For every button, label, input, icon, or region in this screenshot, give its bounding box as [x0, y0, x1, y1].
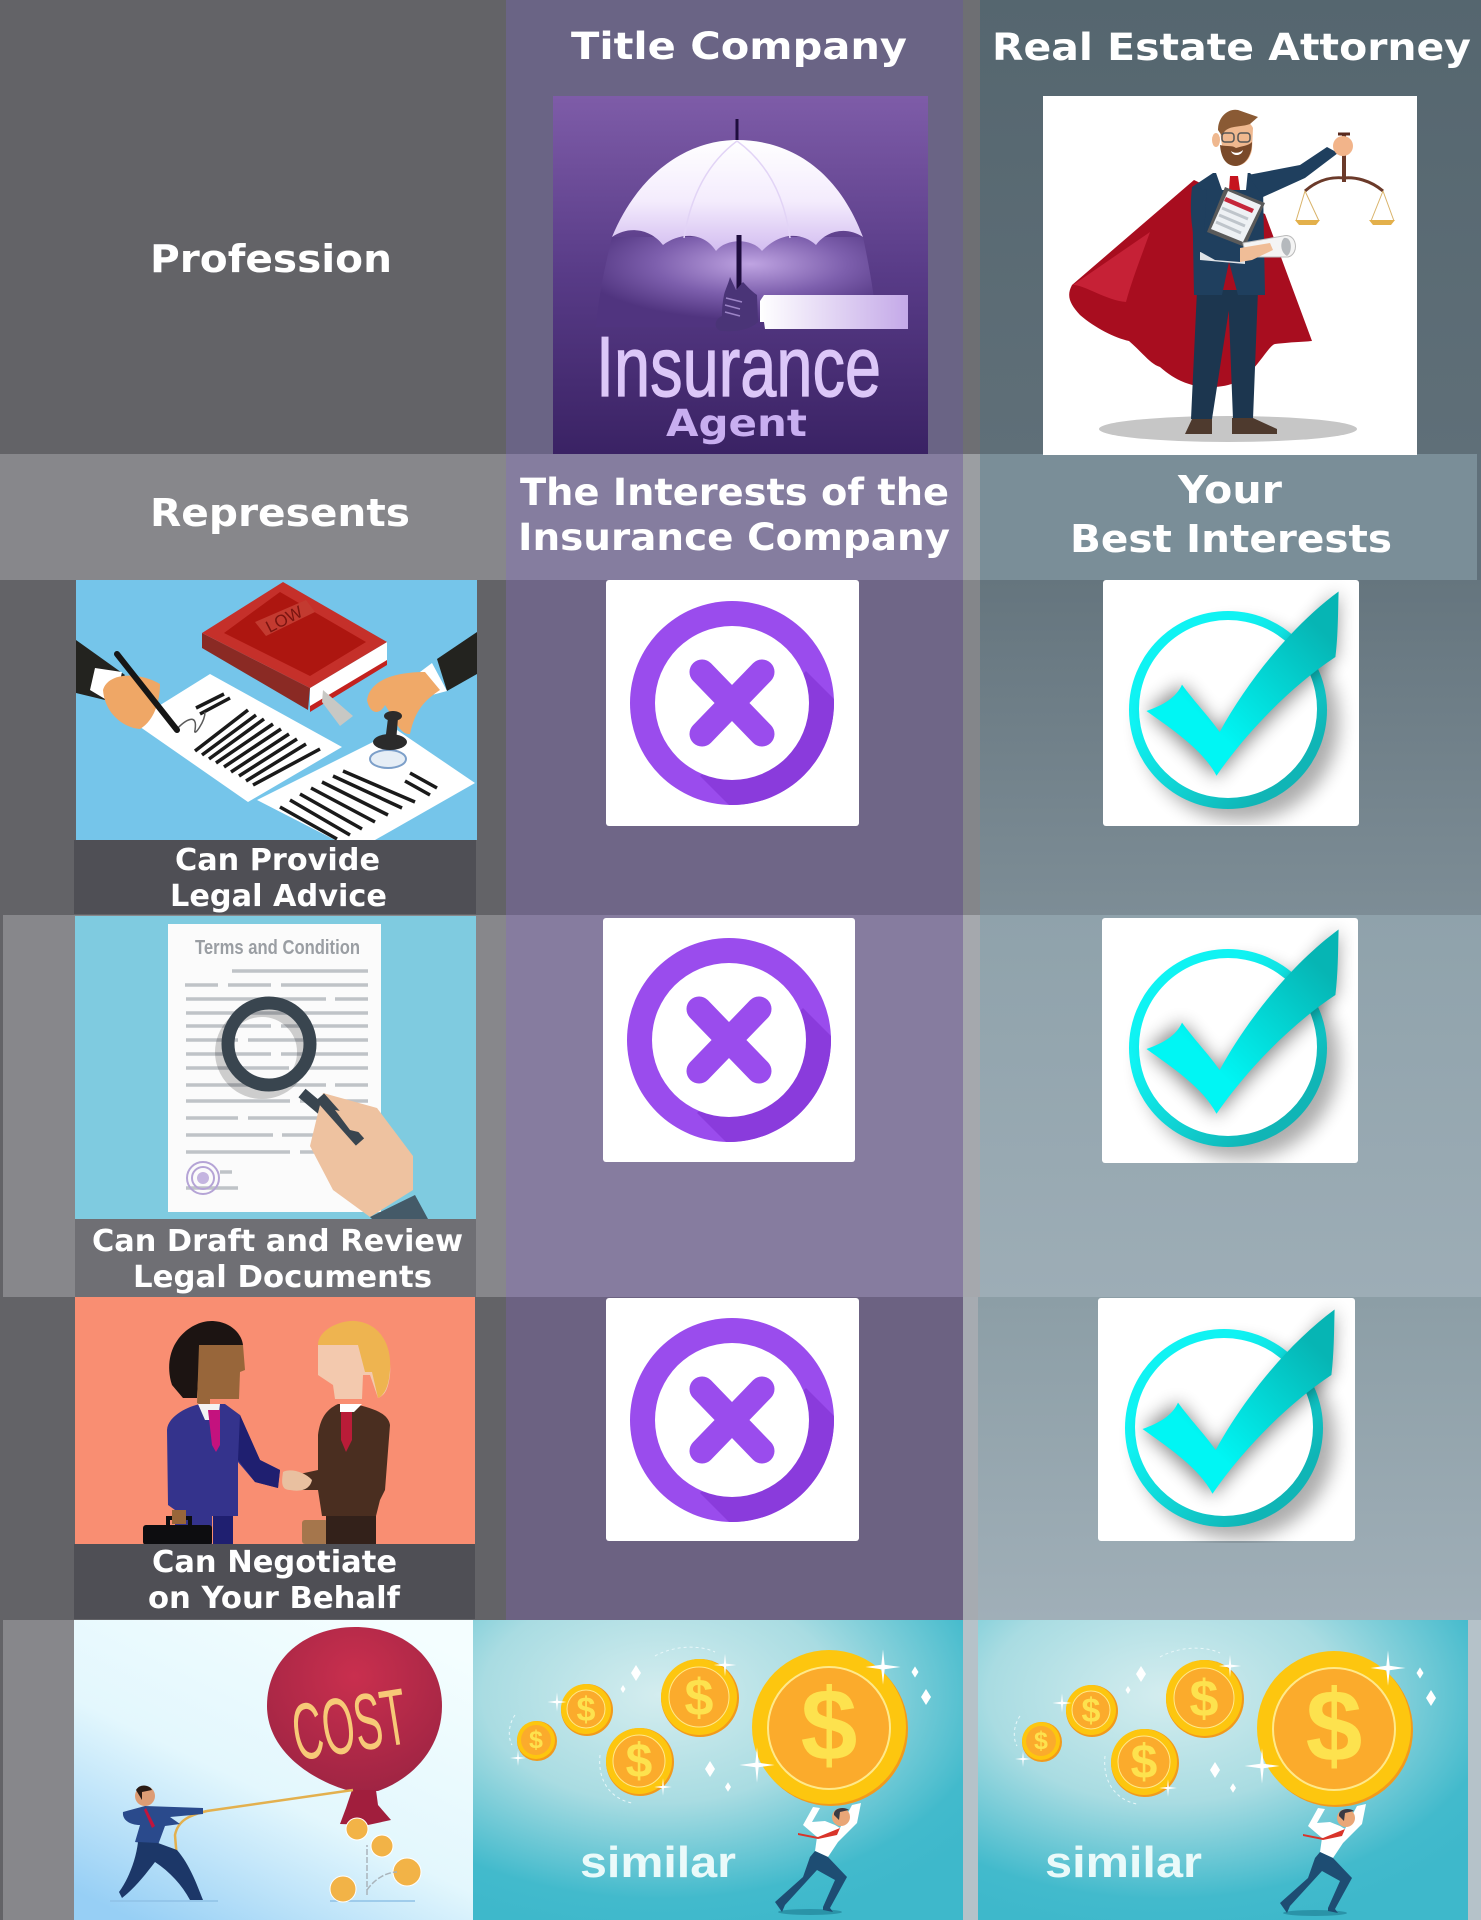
clipboard with documents	[1207, 187, 1265, 247]
image: similar cost, man lifting coins (title company): $	[577, 1691, 596, 1729]
jacket	[1192, 173, 1265, 295]
image: similar cost, man lifting coins (title company): $	[685, 1669, 714, 1727]
rope	[175, 1790, 353, 1872]
image: similar cost, man lifting coins (attorney): $	[1034, 1727, 1048, 1755]
icon: X, title company, negotiate	[606, 1298, 859, 1541]
row label: Represents: Represents	[150, 491, 410, 535]
shoes	[1185, 418, 1277, 434]
law book	[202, 582, 387, 726]
caption: Can Draft and Review Legal Documents: Can Draft and Review	[92, 1224, 463, 1259]
collar and tie	[1215, 170, 1248, 190]
heading: Real Estate Attorney: Real Estate Attorney	[992, 26, 1471, 69]
seal	[187, 1162, 219, 1194]
image: similar cost, man lifting coins (title company): $	[626, 1735, 653, 1788]
scales of justice	[1295, 134, 1395, 225]
image: two businessmen shaking hands	[75, 1297, 475, 1545]
left man	[143, 1321, 280, 1545]
image: similar cost, man lifting coins (attorney): $	[1131, 1736, 1158, 1789]
left sleeve	[76, 640, 125, 700]
image: legal advice, hands signing and stamping	[76, 580, 477, 840]
caption: Can Negotiate on Your Behalf	[74, 1544, 475, 1619]
shadow	[1099, 416, 1357, 442]
document	[168, 924, 381, 1212]
falling coins	[330, 1818, 421, 1902]
image: magnifier reviewing terms and condition document	[75, 916, 476, 1219]
pen	[117, 654, 177, 730]
left cuff and hand	[90, 668, 122, 705]
hand and sleeve	[310, 1093, 428, 1219]
row label: Profession: Profession	[150, 237, 392, 281]
text: Insurance: Insurance	[596, 320, 881, 415]
text: Best Interests: Best Interests	[1070, 517, 1392, 561]
image: similar cost, man lifting coins (attorney): $	[1190, 1670, 1219, 1728]
caption: Can Provide Legal Advice: Legal Advice	[170, 879, 387, 914]
icon: hand gripping handle	[716, 277, 758, 331]
image: similar cost, man lifting coins (title company): $	[801, 1668, 857, 1782]
caption: Can Negotiate on Your Behalf: on Your Behalf	[148, 1581, 401, 1616]
caption: Can Provide Legal Advice	[74, 840, 476, 914]
head	[1212, 110, 1258, 166]
red cape	[1069, 180, 1312, 387]
image: similar cost, man lifting coins (attorney): $	[1306, 1669, 1362, 1783]
image: attorney superhero with cape and scales	[1043, 96, 1417, 455]
rolled document	[1243, 236, 1295, 257]
image: similar cost, man lifting coins (attorney): $	[1082, 1692, 1101, 1730]
icon: umbrella canopy	[612, 140, 863, 251]
heading: Title Company: Title Company	[571, 25, 907, 68]
icon: check, attorney, legal documents	[1102, 918, 1358, 1163]
caption: Can Draft and Review Legal Documents	[75, 1219, 476, 1297]
image: similar cost, man lifting coins (title company): $	[529, 1726, 543, 1754]
caption: Can Negotiate on Your Behalf: Can Negotiate	[152, 1545, 397, 1580]
image: similar cost, man lifting coins (attorney)	[978, 1620, 1468, 1920]
text: similar: similar	[580, 1838, 736, 1887]
shirt band	[1200, 252, 1245, 264]
image: insurance agent umbrella	[553, 96, 928, 454]
businessman pulling	[119, 1785, 203, 1900]
trousers	[1191, 290, 1258, 419]
text: Your: Your	[1177, 468, 1282, 512]
caption: Can Provide Legal Advice: Can Provide	[175, 843, 380, 878]
right man	[295, 1321, 390, 1544]
arm and hand holding documents	[1191, 187, 1240, 262]
magnifier	[221, 1003, 360, 1142]
text: COST: COST	[286, 1672, 413, 1777]
right cuff and hand	[420, 663, 447, 695]
text: similar: similar	[1045, 1838, 1202, 1887]
stamp	[370, 711, 407, 768]
icon: check, attorney, legal advice	[1103, 580, 1359, 826]
icon: X, title company, legal documents	[603, 918, 855, 1162]
signature	[176, 712, 205, 732]
document being stamped	[257, 730, 475, 840]
icon: check, attorney, negotiate	[1098, 1298, 1355, 1541]
text: LOW: LOW	[263, 602, 306, 637]
caption: Can Draft and Review Legal Documents: Legal Documents	[133, 1260, 432, 1295]
document being signed	[133, 674, 342, 802]
text: Terms and Condition: Terms and Condition	[195, 937, 360, 959]
text: The Interests of the: The Interests of the	[520, 471, 949, 514]
balloon neck	[340, 1790, 391, 1825]
handshake	[282, 1470, 312, 1491]
raised arm	[1248, 147, 1338, 197]
text: Agent: Agent	[666, 402, 807, 445]
image: cost balloon pulled by businessman	[74, 1620, 474, 1920]
image: similar cost, man lifting coins (title company)	[473, 1620, 963, 1920]
text: Insurance Company: Insurance Company	[518, 516, 950, 559]
right sleeve	[437, 632, 477, 691]
icon: sleeve	[760, 295, 908, 329]
icon: X, title company, legal advice	[606, 580, 859, 826]
balloon	[267, 1627, 442, 1791]
